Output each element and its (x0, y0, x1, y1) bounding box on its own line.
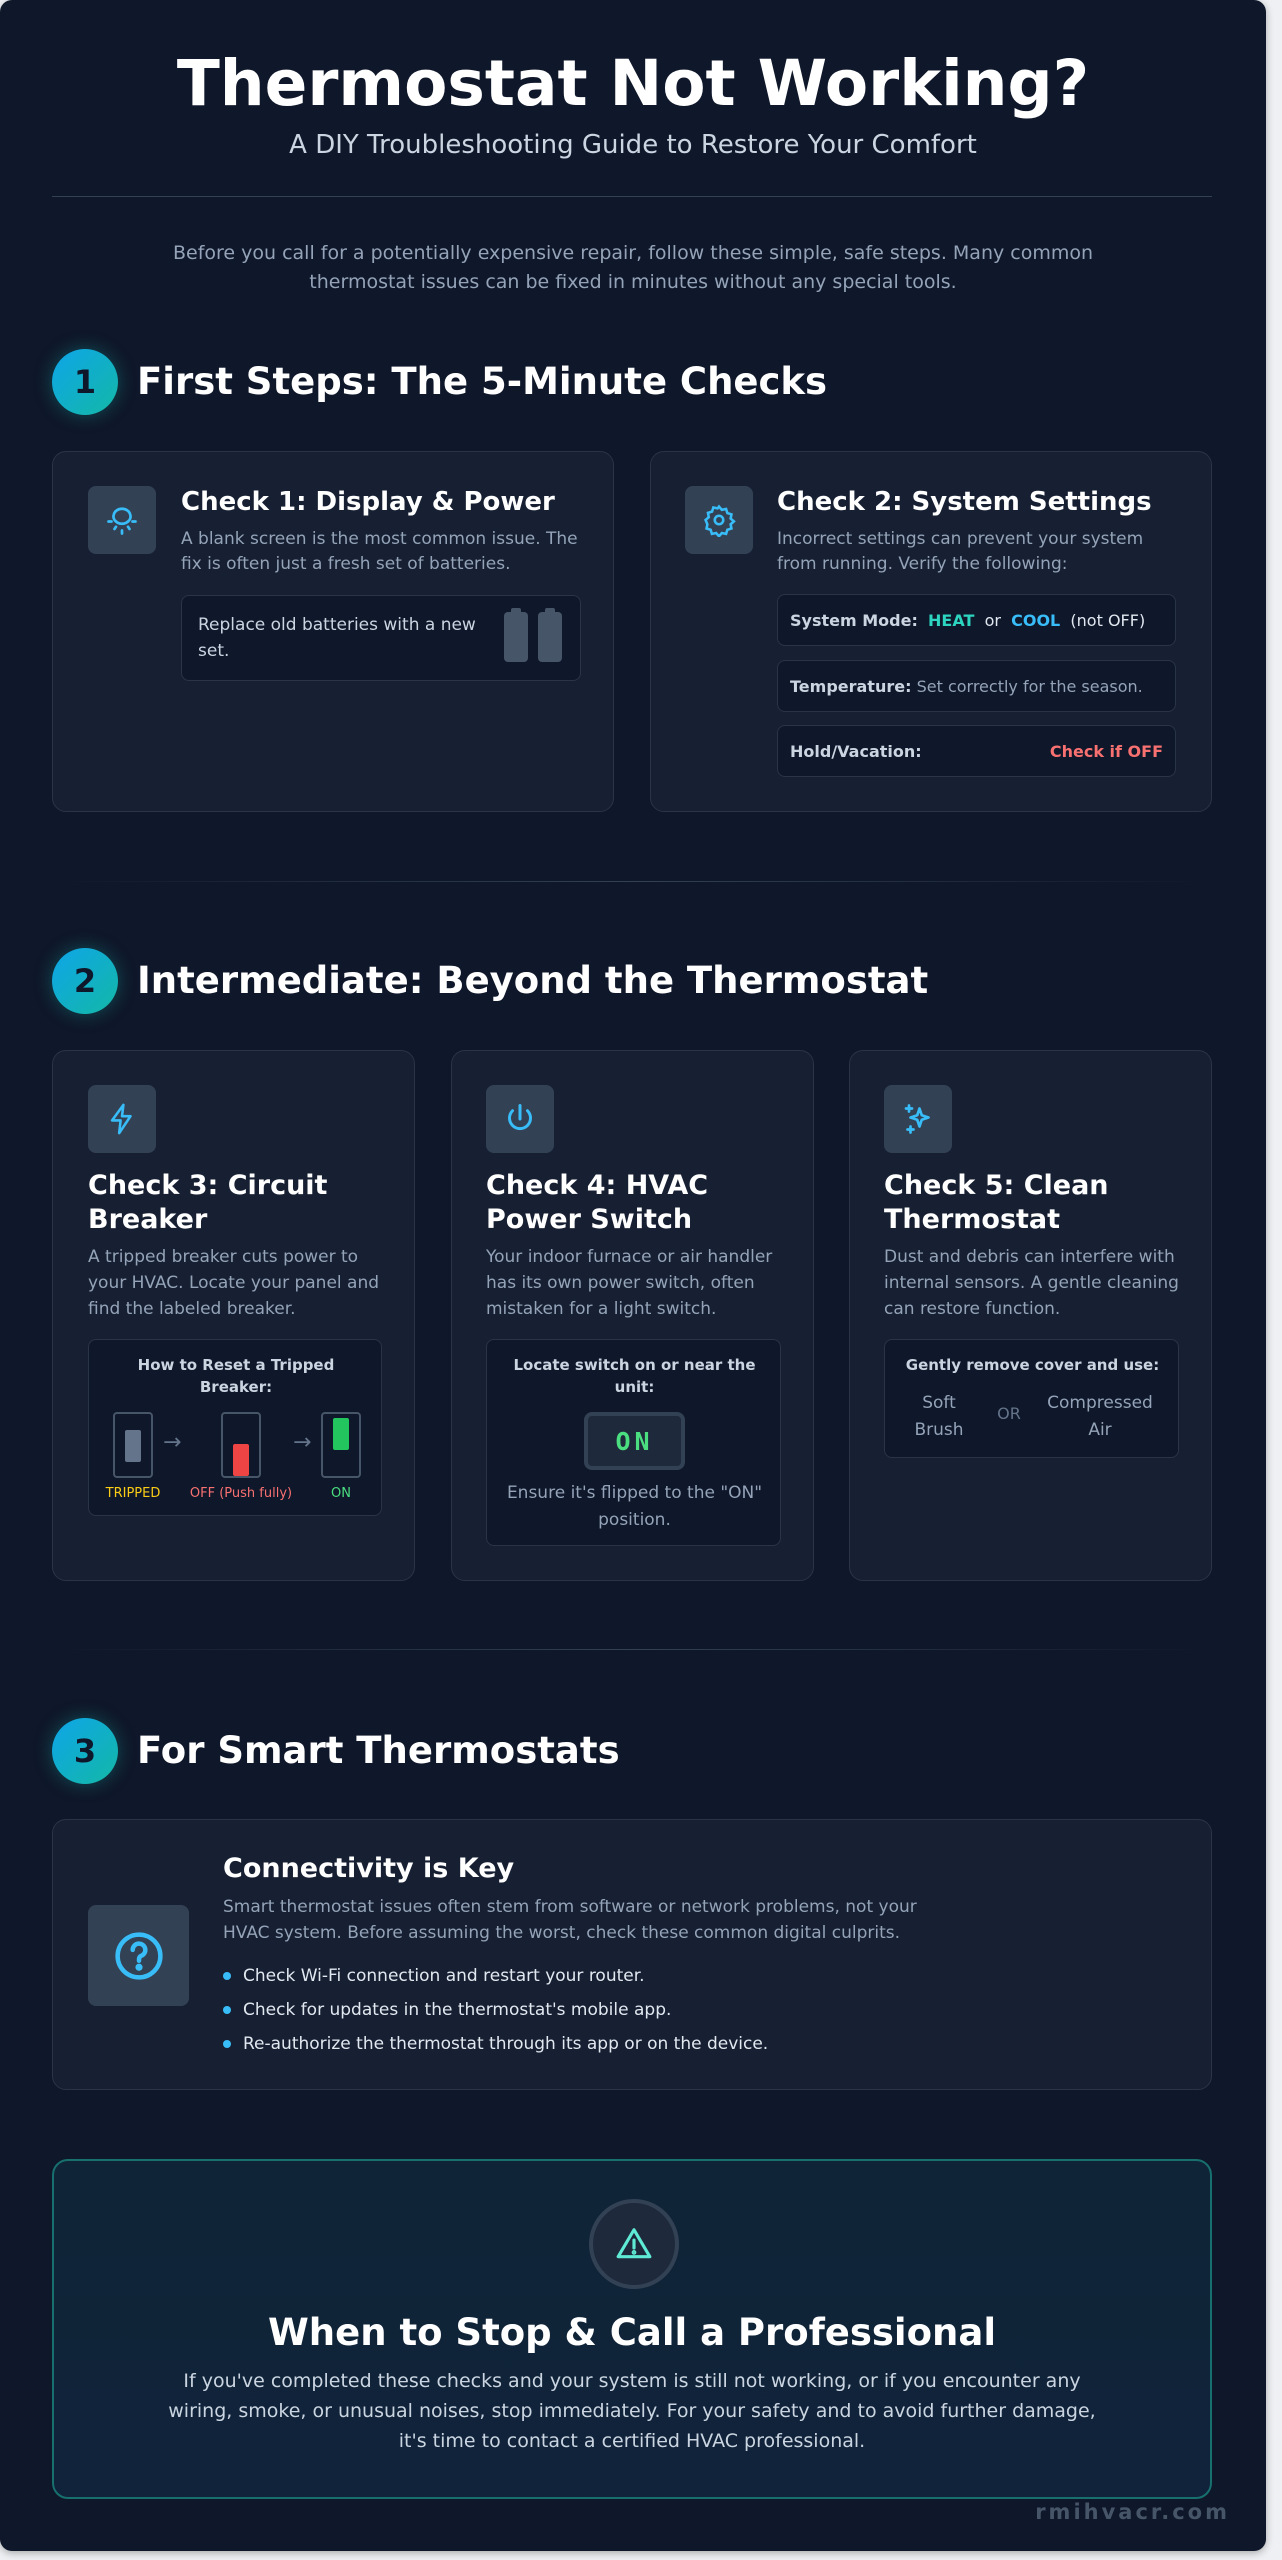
panel: check 4 (451, 1050, 814, 1581)
icon: ON switch: ON (615, 1426, 654, 1456)
breaker diagram: How to Reset a Tripped (138, 1356, 334, 1374)
description: Incorrect settings can prevent your system from running. Verify the following: (777, 529, 1143, 574)
breaker diagram: ON (331, 1486, 351, 1501)
panel: check 1 (52, 451, 614, 812)
switch callout: Ensure it's flipped to the "ON" (507, 1483, 762, 1503)
section 2 heading: Intermediate: Beyond the Thermostat (137, 959, 928, 1002)
description: Your indoor furnace or air handler has its own power switch, often mistaken for a light switch. (486, 1247, 772, 1319)
icon: bolt (88, 1085, 156, 1153)
icon: lightbulb (88, 486, 156, 554)
heading: Connectivity is Key (223, 1853, 514, 1884)
switch callout: Locate switch on or near the (513, 1356, 756, 1374)
cleaning callout: Gently remove cover and use: (906, 1356, 1159, 1374)
description: A tripped breaker cuts power to your HVAC. Locate your panel and find the labeled breaker. (88, 1247, 379, 1319)
breaker diagram: → (293, 1430, 311, 1455)
section 3 badge: 3 (74, 1732, 96, 1770)
setting: hold (777, 725, 1176, 777)
cleaning callout: OR (997, 1404, 1021, 1423)
description: Smart thermostat issues often stem from software or network problems, not your HVAC system. Before assuming the worst, check these common digital culprits. (223, 1897, 917, 1943)
setting: temperature: Set correctly for the season. (917, 676, 1143, 696)
watermark: rmihvacr.com (1035, 2500, 1230, 2524)
setting: temperature: Temperature: (790, 676, 911, 696)
cleaning callout (884, 1339, 1179, 1458)
description: Dust and debris can interfere with internal sensors. A gentle cleaning can restore function. (884, 1247, 1179, 1319)
subtitle: A DIY Troubleshooting Guide to Restore Your Comfort (289, 130, 977, 160)
icon: question (88, 1905, 189, 2006)
icon: ON switch (584, 1412, 685, 1470)
icon: power (486, 1085, 554, 1153)
section 2 badge: 2 (74, 962, 96, 1000)
heading: Check 2: System Settings (777, 487, 1152, 517)
section 1 badge: 1 (74, 363, 96, 401)
heading: Check 5: Clean Thermostat (884, 1170, 1109, 1235)
setting: system mode: HEAT (928, 610, 974, 630)
cleaning callout: Air (1088, 1420, 1112, 1440)
cleaning callout: Brush (914, 1420, 964, 1440)
section 1 heading: First Steps: The 5-Minute Checks (137, 360, 827, 403)
breaker diagram (88, 1339, 382, 1516)
setting: system mode: COOL (1011, 610, 1060, 630)
section 1 badge (52, 349, 118, 415)
setting: temperature (777, 660, 1176, 712)
switch callout (486, 1339, 781, 1546)
heading: Check 4: HVAC Power Switch (486, 1170, 708, 1235)
intro text: Before you call for a potentially expensive repair, follow these simple, safe steps. Many common thermostat issues can be fixed in minutes without any special tools. (173, 242, 1093, 293)
panel: call a professional (52, 2159, 1212, 2499)
setting: system mode: or (not OFF) (985, 610, 1145, 630)
panel: check 3 (52, 1050, 415, 1581)
text: If you've completed these checks and your system is still not working, or if you encounter any wiring, smoke, or unusual noises, stop immediately. For your safety and to avoid further damage, it's time to contact a certified HVAC professional. (168, 2370, 1096, 2452)
bullet list: Re-authorize the thermostat through its app or on the device. (243, 2034, 768, 2054)
panel: connectivity (52, 1819, 1212, 2090)
breaker diagram: OFF (Push fully) (190, 1486, 292, 1501)
cleaning callout: Soft (922, 1393, 956, 1413)
heading: Check 1: Display & Power (181, 487, 555, 517)
switch callout: unit: (615, 1378, 654, 1396)
bullet list: Check for updates in the thermostat's mobile app. (243, 2000, 671, 2020)
setting: system mode (777, 594, 1176, 646)
section 2 badge (52, 948, 118, 1014)
setting: hold: Hold/Vacation: (790, 742, 922, 760)
section 3 heading: For Smart Thermostats (137, 1729, 620, 1772)
icon: warning (589, 2199, 679, 2289)
description: A blank screen is the most common issue. The fix is often just a fresh set of batteries. (181, 529, 578, 574)
breaker diagram: TRIPPED (106, 1486, 160, 1501)
heading: When to Stop & Call a Professional (268, 2311, 996, 2354)
section 3 badge (52, 1718, 118, 1784)
cleaning callout: Compressed (1047, 1393, 1153, 1413)
bullet list (223, 1966, 768, 2054)
breaker diagram: → (163, 1430, 181, 1455)
setting: system mode: System Mode: (790, 610, 918, 630)
icon: gear (685, 486, 753, 554)
panel: check 2 (650, 451, 1212, 812)
icon: sparkles (884, 1085, 952, 1153)
title: Thermostat Not Working? (177, 47, 1089, 120)
bullet list: Check Wi-Fi connection and restart your router. (243, 1966, 645, 1986)
heading: Check 3: Circuit Breaker (88, 1170, 327, 1235)
switch callout: position. (598, 1510, 671, 1530)
battery callout: Replace old batteries with a new set. (198, 615, 476, 661)
battery callout (181, 595, 581, 681)
panel: check 5 (849, 1050, 1212, 1581)
icon: batteries (504, 608, 562, 662)
breaker diagram: Breaker: (200, 1378, 272, 1396)
setting: hold: Check if OFF (1050, 742, 1163, 760)
